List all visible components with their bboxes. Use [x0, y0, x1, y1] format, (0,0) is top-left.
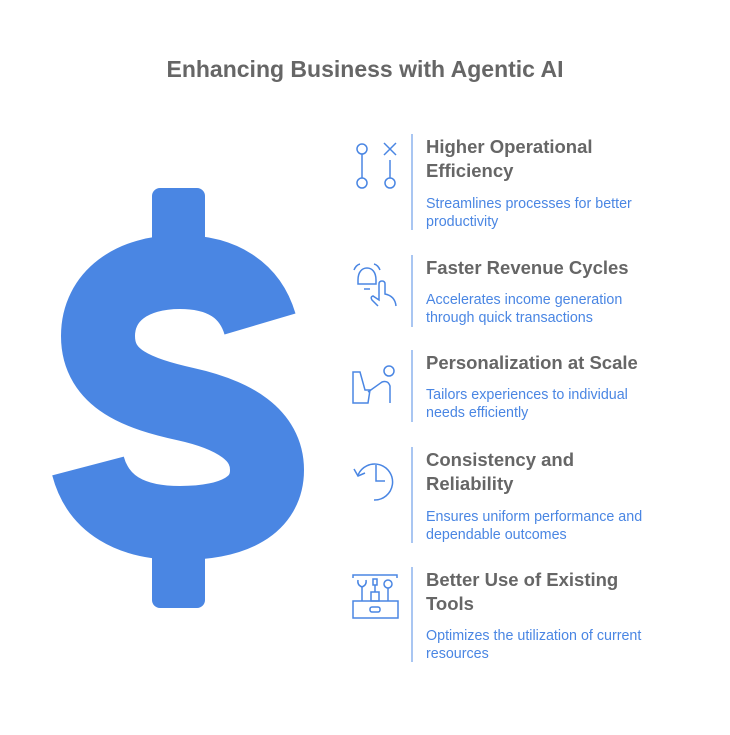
icon: person at desk [352, 365, 395, 404]
description: Optimizes the utilization of current [426, 628, 641, 644]
description [426, 628, 642, 662]
heading: Higher Operational [426, 136, 593, 157]
icon: bell and hand [353, 263, 397, 306]
item 2 [353, 255, 629, 327]
description: Streamlines processes for better [426, 196, 632, 212]
icon: nodes [356, 142, 396, 189]
heading: Consistency and [426, 449, 574, 470]
icon: clock [353, 463, 394, 501]
description [426, 292, 622, 326]
title: Enhancing Business with Agentic AI [166, 56, 564, 82]
icon: dollar sign [52, 188, 304, 608]
description: Accelerates income generation [426, 292, 622, 308]
icon: toolbox [352, 574, 399, 619]
heading: Reliability [426, 473, 513, 494]
item 1 [356, 134, 632, 230]
description: productivity [426, 214, 498, 230]
heading: Faster Revenue Cycles [426, 257, 629, 278]
heading: Tools [426, 593, 474, 614]
description: resources [426, 646, 489, 662]
heading: Efficiency [426, 160, 513, 181]
heading: Better Use of Existing [426, 569, 618, 590]
item 3 [352, 350, 638, 422]
item 5 [352, 567, 642, 662]
description: through quick transactions [426, 310, 593, 326]
heading [426, 569, 618, 614]
item 4 [353, 447, 642, 543]
description: needs efficiently [426, 405, 528, 421]
heading [426, 449, 574, 494]
description: dependable outcomes [426, 527, 567, 543]
description [426, 196, 632, 230]
description: Ensures uniform performance and [426, 509, 642, 525]
description: Tailors experiences to individual [426, 387, 628, 403]
description [426, 387, 628, 421]
heading [426, 136, 593, 181]
heading: Personalization at Scale [426, 352, 638, 373]
description [426, 509, 642, 543]
